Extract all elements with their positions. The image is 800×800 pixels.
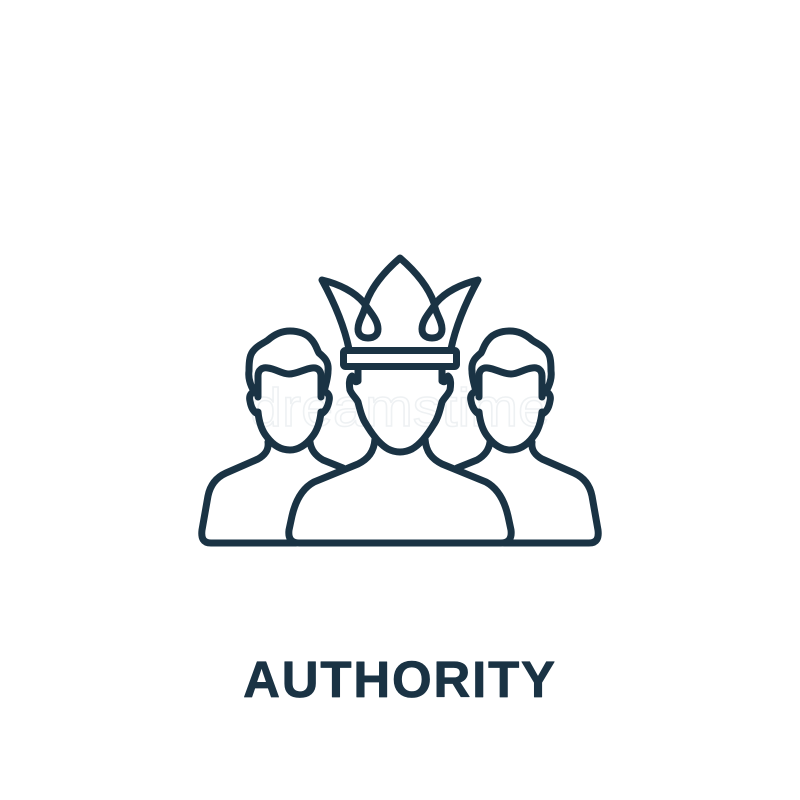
- icon: centre person: [289, 370, 511, 543]
- icon: group of three people with crown: [202, 258, 598, 543]
- title: AUTHORITY: [243, 651, 557, 708]
- watermark: dreamstime: [250, 378, 550, 438]
- icon: right person: [457, 331, 598, 543]
- icon: left person: [202, 331, 343, 543]
- icon: crown: [322, 258, 478, 366]
